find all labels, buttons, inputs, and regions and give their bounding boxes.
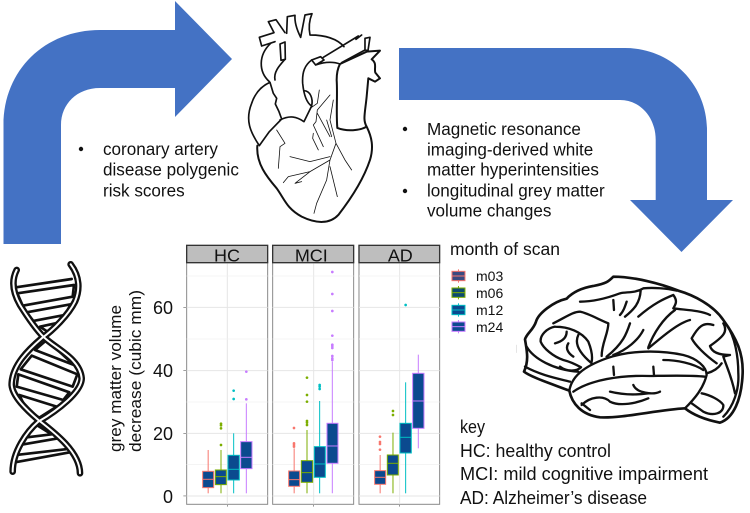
key: AD: Alzheimer’s disease	[460, 488, 647, 508]
y-axis tick labels: 0	[163, 487, 173, 507]
panel: HC	[187, 245, 268, 504]
y-axis title: grey matter volume	[106, 305, 125, 452]
y-axis tick labels	[153, 298, 173, 507]
icon: DNA helix	[12, 264, 82, 473]
y-axis tick labels: 20	[153, 424, 173, 444]
arrow: DNA to heart	[4, 1, 232, 244]
icon: heart	[249, 14, 380, 222]
legend: m03	[476, 268, 503, 284]
text block: imaging measures: Magnetic resonance	[427, 120, 581, 139]
legend: m12	[476, 302, 503, 318]
legend: m06	[476, 285, 503, 301]
text block: imaging measures: imaging-derived white	[427, 140, 593, 160]
icon: brain	[517, 277, 743, 423]
axis ticks	[183, 307, 400, 507]
key	[460, 417, 708, 508]
y-axis tick labels: 40	[153, 361, 173, 381]
legend: month of scan	[450, 239, 560, 259]
text block: imaging measures: volume changes	[427, 202, 551, 220]
key: HC: healthy control	[460, 441, 611, 461]
arrow: heart to brain	[399, 48, 733, 252]
boxplot chart	[183, 245, 440, 507]
text block: polygenic risk: disease polygenic	[103, 160, 239, 180]
text block: imaging measures: matter hyperintensities	[427, 160, 599, 180]
text block: polygenic risk: risk scores	[103, 182, 185, 200]
panel: AD	[359, 245, 440, 504]
text block: imaging measures: longitudinal grey matter	[427, 182, 605, 200]
y-axis title	[106, 290, 145, 452]
key: key	[460, 417, 485, 437]
panel: MCI: MCI	[295, 245, 328, 265]
legend: m24	[476, 319, 503, 335]
legend	[450, 239, 560, 335]
panel: MCI	[273, 245, 354, 504]
key: MCI: mild cognitive impairment	[460, 464, 708, 484]
text block: imaging measures	[403, 120, 605, 220]
panel: AD: AD	[388, 245, 413, 265]
text block: polygenic risk	[79, 140, 239, 200]
text block: polygenic risk: coronary artery	[103, 140, 218, 159]
y-axis tick labels: 60	[153, 298, 173, 318]
y-axis title: decrease (cubic mm)	[126, 290, 145, 452]
panel: HC: HC	[214, 245, 240, 265]
